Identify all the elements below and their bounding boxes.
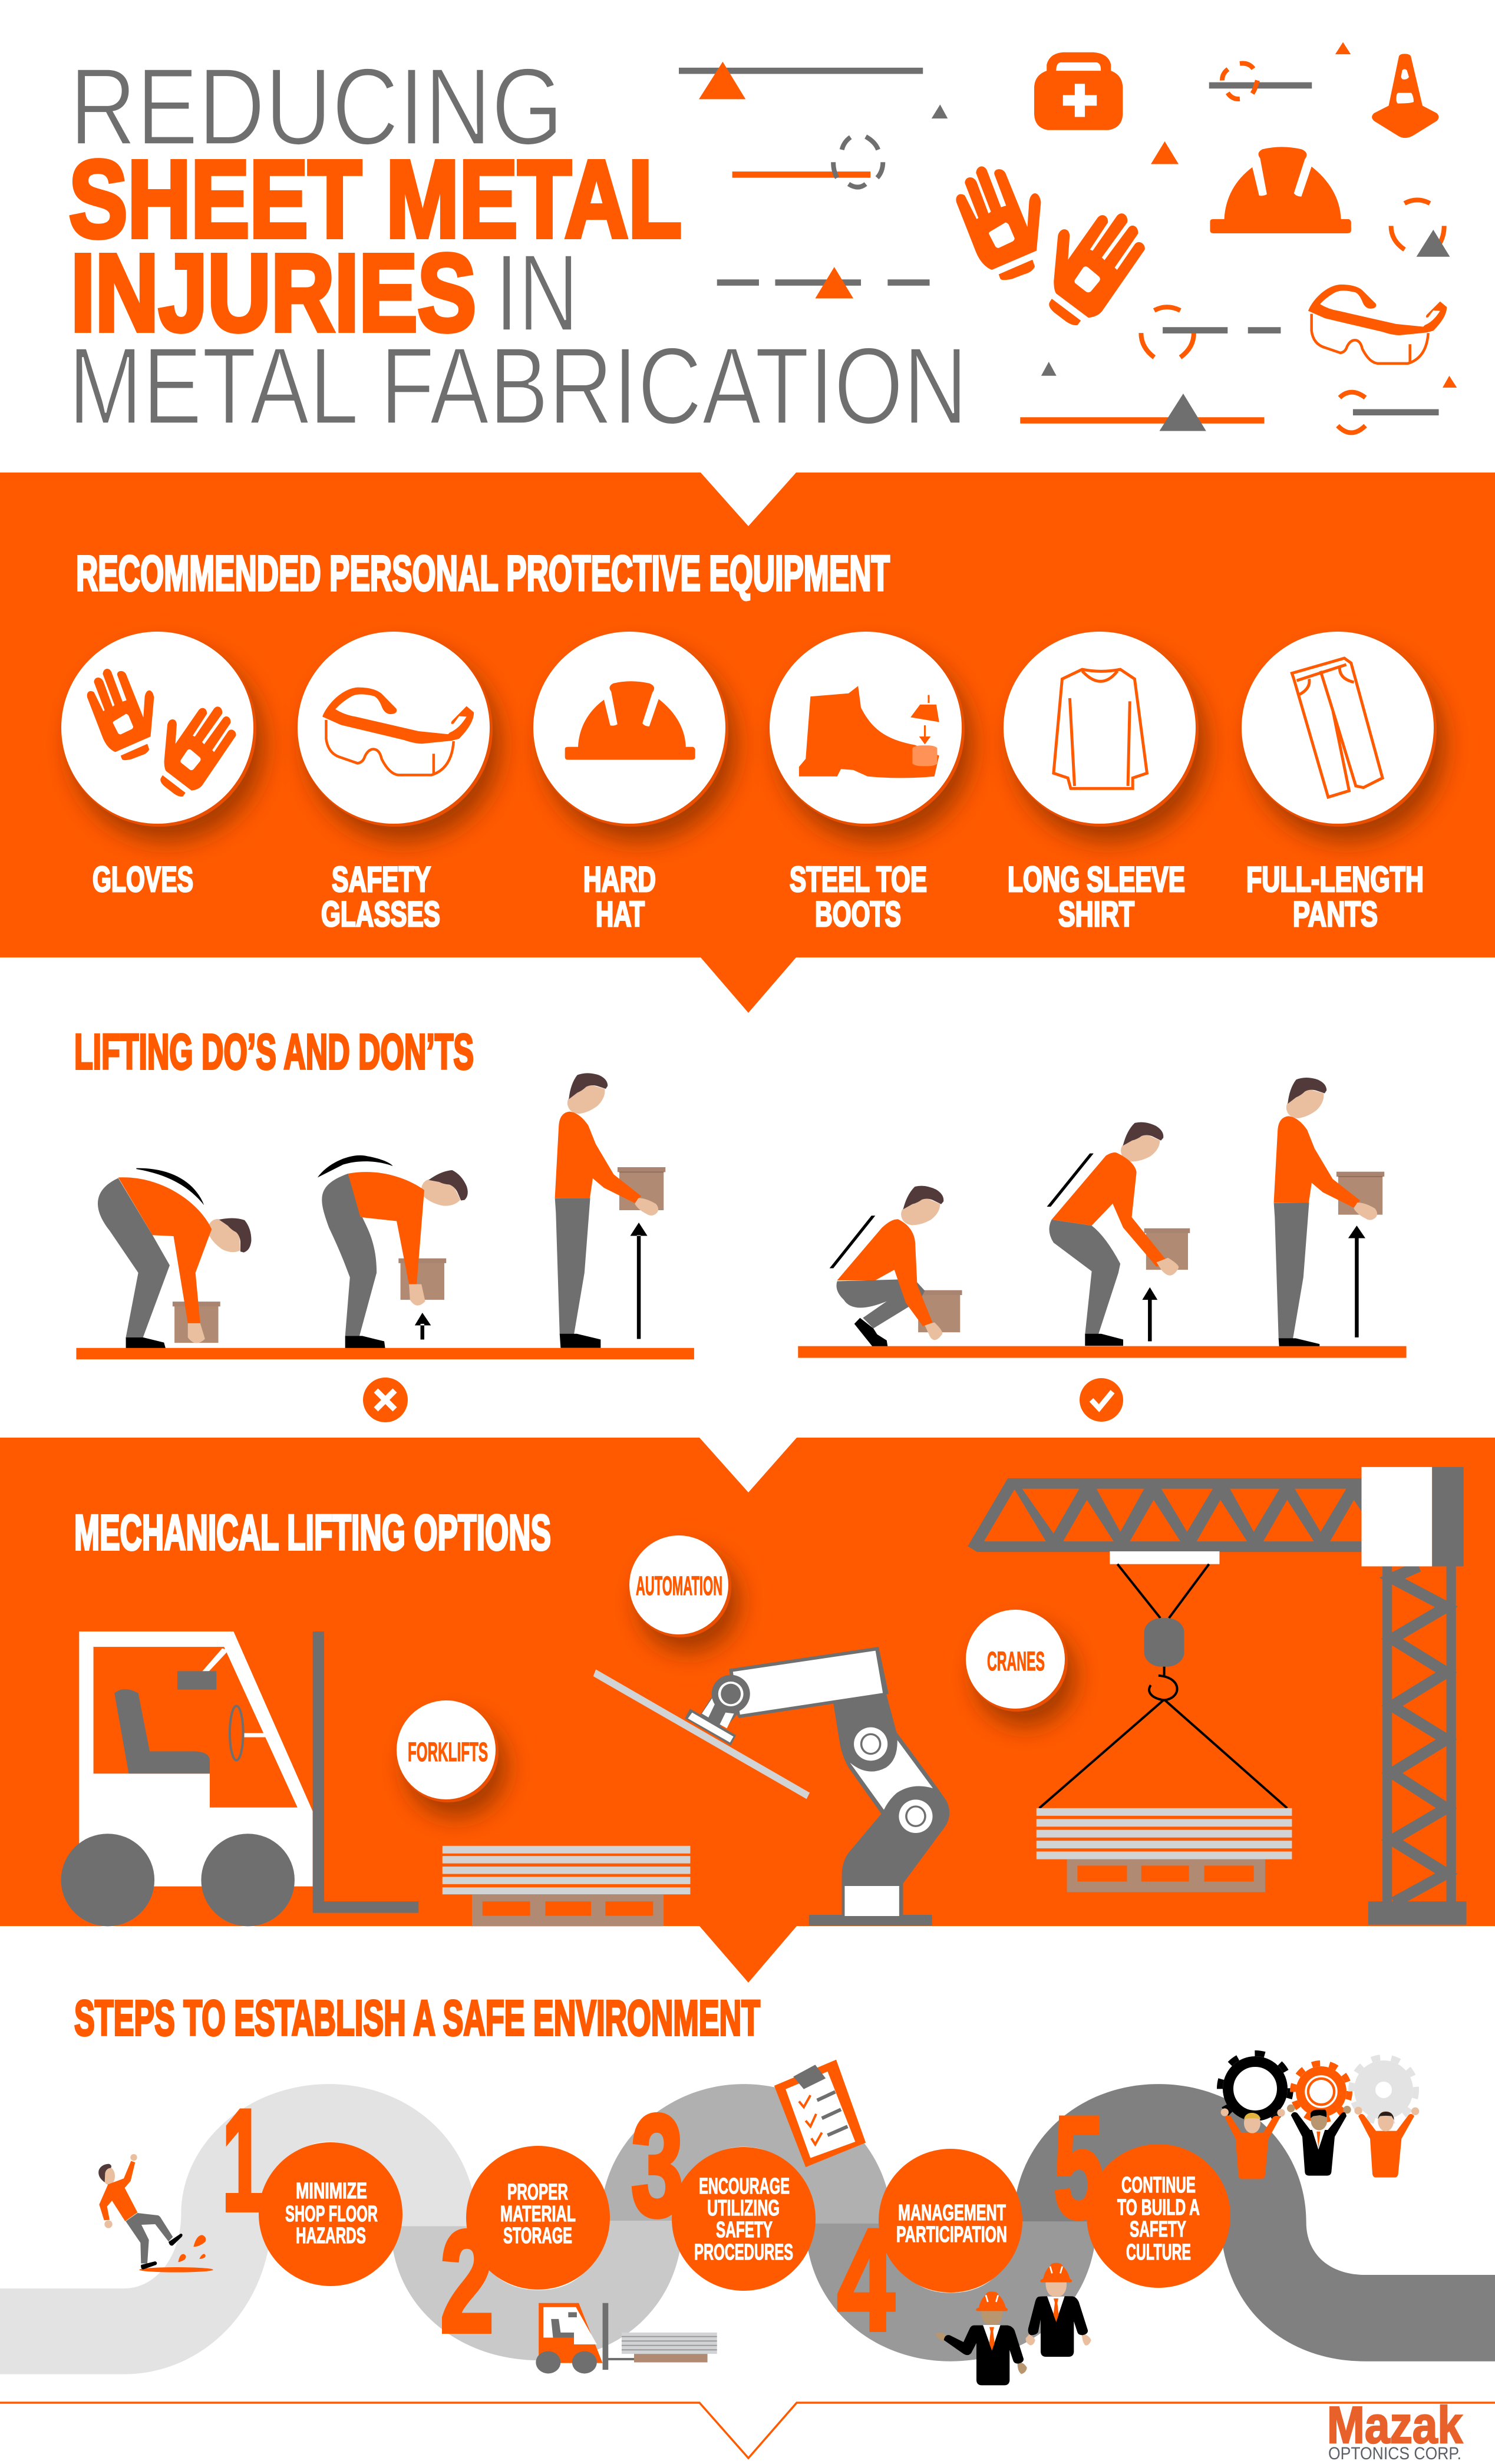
heading: RECOMMENDED PERSONAL PROTECTIVE EQUIPMENT — [76, 546, 890, 601]
step 5 — [1054, 2086, 1230, 2288]
step 1 — [222, 2079, 402, 2286]
panel: personal protective equipment — [0, 473, 1495, 1013]
step 2: MATERIAL — [500, 2202, 576, 2227]
figure: correct lift, standing — [1274, 1078, 1384, 1352]
step 4: PARTICIPATION — [896, 2222, 1007, 2247]
title: METAL FABRICATION — [68, 325, 968, 447]
step 3 — [631, 2085, 816, 2291]
item: hard hat: HAT — [596, 894, 645, 934]
item: hard hat — [533, 632, 728, 934]
item: steel toe boots — [770, 632, 965, 934]
item: safety glasses: GLASSES — [321, 894, 440, 934]
heading: MECHANICAL LIFTING OPTIONS — [74, 1505, 551, 1560]
panel: mechanical lifting options — [0, 1438, 1495, 1983]
item: safety glasses: SAFETY — [332, 860, 431, 899]
icon: correct mark — [1080, 1378, 1123, 1422]
title: INJURIES — [71, 232, 476, 354]
manager left — [935, 2291, 1027, 2385]
step 4 — [837, 2149, 1022, 2360]
item: long sleeve shirt — [1004, 632, 1199, 934]
figures: team raising gears — [1221, 2105, 1419, 2179]
title: REDUCING — [70, 46, 563, 168]
heading: LIFTING DO’S AND DON’TS — [74, 1024, 474, 1079]
step 3: 3 — [631, 2085, 684, 2246]
item: full-length pants: FULL-LENGTH — [1246, 860, 1424, 899]
item: gloves — [61, 632, 256, 899]
step 5: CONTINUE — [1121, 2173, 1196, 2198]
floor: wrong lift — [76, 1348, 694, 1359]
figure: wrong lift, bent over — [98, 1168, 256, 1349]
decorative safety icons cluster — [679, 42, 1457, 432]
panel: lifting dos and don'ts — [74, 1024, 1407, 1422]
bubble: cranes: CRANES — [987, 1646, 1045, 1676]
bubble: cranes — [966, 1610, 1068, 1712]
tower crane — [968, 1467, 1466, 1925]
step 5: CULTURE — [1126, 2240, 1191, 2265]
step 3: UTILIZING — [707, 2196, 780, 2221]
step 5: SAFETY — [1130, 2217, 1186, 2242]
icon: traffic cone — [1372, 54, 1438, 138]
heading: STEPS TO ESTABLISH A SAFE ENVIRONMENT — [74, 1990, 760, 2046]
icon: gloves — [956, 166, 1145, 325]
icon: three gears — [1220, 2053, 1416, 2124]
step 2: STORAGE — [503, 2224, 572, 2248]
figures: managers in hard hats — [935, 2263, 1091, 2385]
step 4: MANAGEMENT — [898, 2201, 1006, 2225]
figure: correct lift, squat — [830, 1183, 962, 1346]
item: hard hat: HARD — [583, 860, 656, 899]
line and triangle accents — [679, 62, 1457, 432]
panel: steps to a safe environment — [0, 1990, 1495, 2385]
title: SHEET METAL — [69, 138, 682, 260]
panel background with notch and pointer — [0, 1438, 1495, 1983]
sheet stack on crane — [1037, 1808, 1292, 1892]
figure: wrong lift, rising — [318, 1155, 474, 1349]
figure: correct lift, rising — [1047, 1119, 1190, 1346]
step 1: 1 — [222, 2079, 264, 2241]
step 3: PROCEDURES — [694, 2240, 793, 2265]
step 2: PROPER — [507, 2180, 568, 2205]
panel background with notch and pointer — [0, 473, 1495, 1013]
step 5: TO BUILD A — [1117, 2195, 1200, 2220]
figure: wrong lift, standing — [555, 1073, 665, 1348]
step 2 — [440, 2146, 610, 2362]
step 1: SHOP FLOOR — [285, 2202, 378, 2227]
bubble: automation — [629, 1535, 731, 1637]
logo: Mazak Optonics Corp: Mazak — [1327, 2396, 1463, 2454]
title — [68, 46, 968, 447]
manager right — [1026, 2263, 1091, 2357]
figure: worker slipping — [98, 2154, 213, 2273]
item: safety glasses — [298, 632, 493, 934]
forklift — [61, 1631, 418, 1926]
step 3: ENCOURAGE — [699, 2174, 790, 2199]
step 3: SAFETY — [716, 2218, 773, 2242]
robot arm — [593, 1647, 949, 1925]
bubble: forklifts: FORKLIFTS — [408, 1737, 488, 1767]
step 1: HAZARDS — [296, 2224, 366, 2248]
icon: wrong mark — [363, 1378, 408, 1422]
item: steel toe boots: BOOTS — [815, 894, 901, 934]
floor: correct lift — [798, 1346, 1407, 1358]
bubble: automation: AUTOMATION — [636, 1571, 722, 1601]
step 4: 4 — [837, 2199, 895, 2360]
item: gloves: GLOVES — [93, 860, 193, 899]
item: full-length pants — [1242, 632, 1437, 934]
title: IN — [495, 232, 579, 354]
item: long sleeve shirt: SHIRT — [1058, 894, 1134, 934]
bubble: forklifts — [397, 1700, 499, 1802]
item: full-length pants: PANTS — [1293, 894, 1378, 934]
icon: safety glasses — [1308, 285, 1447, 364]
step 5: 5 — [1054, 2086, 1104, 2248]
item: long sleeve shirt: LONG SLEEVE — [1008, 860, 1185, 899]
icon: clipboard checklist — [774, 2060, 866, 2167]
icon: first aid kit — [1034, 52, 1123, 130]
sheet stack on pallet — [443, 1846, 690, 1926]
step 2: 2 — [440, 2201, 494, 2362]
logo: Mazak Optonics Corp: OPTONICS CORP. — [1328, 2444, 1461, 2463]
icon: hard hat — [1210, 147, 1351, 233]
winding ribbon path — [0, 2084, 1495, 2374]
item: steel toe boots: STEEL TOE — [790, 860, 927, 899]
small forklift with sheets — [536, 2303, 717, 2373]
footer divider with pointer — [0, 2403, 1495, 2458]
step 1: MINIMIZE — [296, 2179, 367, 2204]
